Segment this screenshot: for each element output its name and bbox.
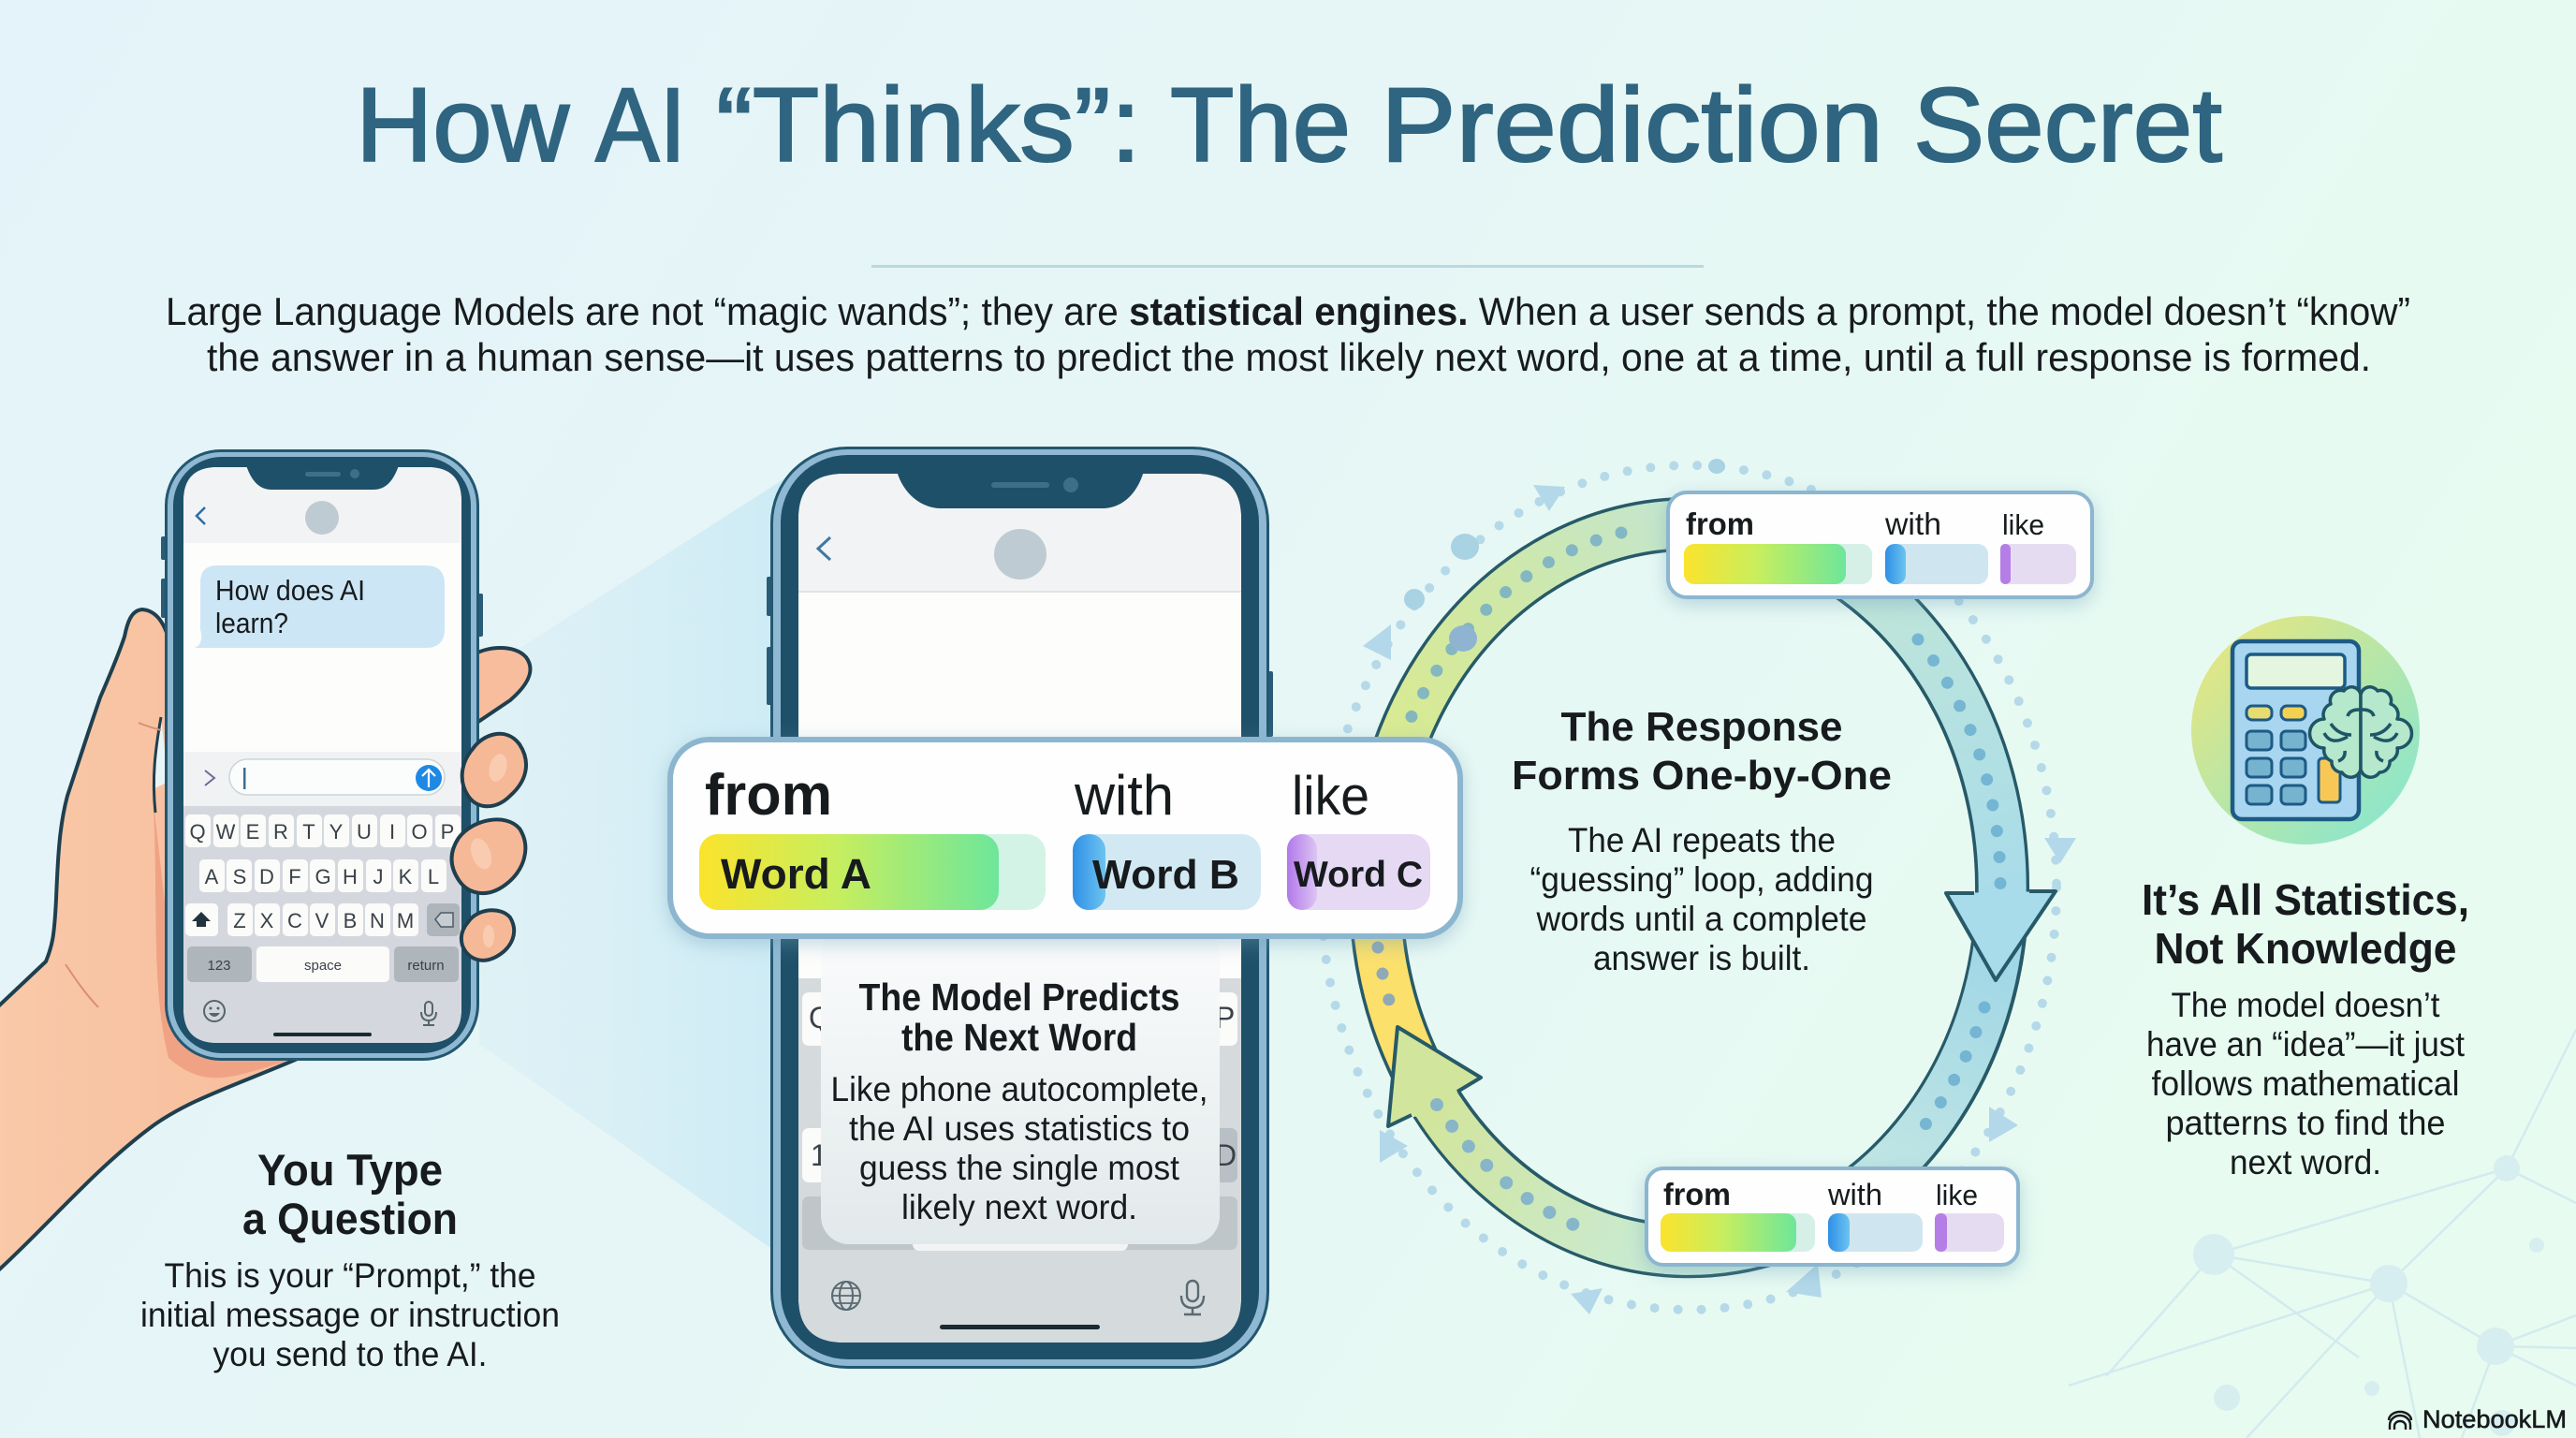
text: it's all statistics: next word. [2230, 1143, 2381, 1181]
keyboard: return [407, 958, 445, 974]
card: bottom small prediction: like [1936, 1179, 1978, 1211]
keyboard: S [233, 865, 246, 888]
keyboard: D [259, 865, 274, 888]
text: response forms one-by-one: “guessing” loop, adding [1530, 860, 1874, 899]
heading: you type a question: You Type [257, 1145, 443, 1195]
card: bottom small prediction: from [1663, 1177, 1731, 1211]
panel: you type a question [0, 449, 560, 1373]
heading: it's all statistics: Not Knowledge [2155, 924, 2456, 973]
bar: word b [1073, 834, 1261, 910]
text: it's all statistics: patterns to find the [2166, 1104, 2445, 1142]
text: it's all statistics [2146, 986, 2466, 1181]
bar: word c: Word C [1294, 855, 1423, 895]
keyboard: V [315, 909, 329, 932]
bar: word c [1287, 834, 1430, 910]
keyboard: J [373, 865, 384, 888]
card: top small prediction: from [1686, 506, 1754, 541]
keyboard: 1 [811, 1138, 827, 1172]
text: it's all statistics: The model doesn’t [2172, 986, 2440, 1024]
chat bubble: How does AI [215, 574, 365, 607]
intro text: Large Language Models are not “magic wands”; they are statistical engines. When a user sends a prompt, the model doesn’t “know” [166, 289, 2410, 333]
keyboard: D [1215, 1138, 1237, 1172]
card: top small prediction [1668, 492, 2092, 597]
intro text [166, 289, 2410, 379]
keyboard: U [357, 820, 372, 844]
keyboard: Q [809, 1001, 832, 1034]
title: Prediction [1381, 66, 1883, 183]
keyboard: K [399, 865, 413, 888]
notch [897, 471, 1144, 508]
card: main prediction [670, 740, 1460, 936]
back chevron [818, 537, 830, 560]
text: you type a question: initial message or instruction [140, 1296, 560, 1334]
brain [2310, 687, 2411, 777]
notch [246, 465, 399, 490]
cycle loop [1377, 524, 2056, 1251]
chat bubble [195, 565, 445, 648]
panel: the model predicts [821, 927, 1220, 1244]
text: response forms one-by-one: Forms One-by-One [1512, 753, 1892, 799]
keyboard: Y [329, 820, 344, 844]
panel: the model predicts: guess the single most [859, 1149, 1180, 1187]
keyboard: space [304, 958, 342, 974]
keyboard: I [389, 820, 395, 844]
keyboard: E [246, 820, 259, 844]
avatar [305, 501, 339, 535]
heading: it's all statistics [2142, 875, 2469, 973]
back chevron [197, 507, 205, 524]
avatar [994, 529, 1046, 580]
title: “Thinks”: [716, 66, 1141, 183]
keyboard: F [288, 865, 301, 888]
keyboard: C [287, 909, 302, 932]
icon: calculator and brain [2191, 616, 2420, 844]
text: response forms one-by-one: words until a complete [1536, 900, 1866, 938]
keyboard: 123 [207, 958, 231, 974]
keyboard: G [315, 865, 331, 888]
title: AI [595, 66, 686, 183]
panel: the model predicts: The Model Predicts [859, 976, 1179, 1019]
panel: the model predicts: the Next Word [901, 1016, 1137, 1059]
text: it's all statistics: follows mathematical [2151, 1064, 2460, 1103]
keyboard: A [205, 865, 219, 888]
heading: you type a question: a Question [242, 1194, 458, 1243]
fingers [451, 734, 526, 961]
keyboard: B [344, 909, 357, 932]
chat bubble: learn? [215, 607, 288, 639]
text: response forms one-by-one [1512, 704, 1892, 977]
input bar [183, 752, 461, 806]
logo: notebooklm: NotebookLM [2422, 1405, 2567, 1433]
keyboard [183, 806, 461, 1043]
card: bottom small prediction: with [1827, 1178, 1882, 1211]
text: you type a question: you send to the AI. [213, 1335, 487, 1373]
text: response forms one-by-one: The AI repeats the [1568, 821, 1836, 859]
outer dotted ring [1321, 459, 2076, 1314]
text: you type a question: This is your “Prompt,” the [165, 1256, 535, 1295]
panel: the model predicts: likely next word. [901, 1188, 1137, 1226]
card: top small prediction: with [1884, 506, 1941, 541]
text: response forms one-by-one: The Response [1561, 704, 1842, 750]
keyboard: O [411, 820, 428, 844]
card: main prediction: like [1292, 766, 1369, 827]
arc: top left [1377, 524, 1778, 852]
intro text: the answer in a human sense—it uses patterns to predict the most likely next word, one at a time, until a full response is formed. [207, 335, 2371, 379]
panel: the model predicts: the AI uses statistics to [849, 1109, 1190, 1148]
card: top small prediction: like [2002, 508, 2044, 541]
keyboard: M [397, 909, 414, 932]
zoom beam [479, 477, 786, 1259]
divider [871, 265, 1704, 268]
phone: large [767, 447, 1273, 1369]
keyboard: Q [189, 820, 206, 844]
panel: the model predicts: Like phone autocomplete, [831, 1070, 1208, 1108]
text: it's all statistics: have an “idea”—it just [2146, 1025, 2466, 1064]
bar: word a [699, 834, 1046, 910]
keyboard: P [441, 820, 454, 844]
card: main prediction: with [1074, 764, 1174, 827]
keyboard: X [260, 909, 274, 932]
keyboard: W [216, 820, 236, 844]
keyboard: R [273, 820, 288, 844]
bar: word a: Word A [721, 850, 871, 898]
title: Secret [1913, 66, 2222, 183]
keyboard: P [1215, 1001, 1235, 1034]
arrowhead: left [1388, 1027, 1597, 1234]
text: you type a question [140, 1256, 560, 1373]
text: response forms one-by-one: answer is built. [1593, 939, 1810, 977]
arrowhead: right [1946, 891, 2056, 980]
keyboard: Z [233, 909, 246, 932]
title: How [356, 66, 570, 183]
heading: it's all statistics: It’s All Statistics, [2142, 875, 2469, 924]
heading: you type a question [242, 1145, 458, 1243]
title: The [1170, 66, 1351, 183]
card: main prediction: from [705, 763, 832, 828]
phone: small [161, 449, 483, 1061]
title [356, 66, 2222, 183]
bar: word b: Word B [1092, 852, 1239, 898]
keyboard: L [428, 865, 439, 888]
keyboard: T [302, 820, 315, 844]
keyboard: H [343, 865, 358, 888]
card: bottom small prediction [1647, 1168, 2018, 1265]
hand [0, 609, 531, 1273]
arc: right lower [1825, 922, 2000, 1214]
arc: right upper [1778, 539, 2002, 899]
arc: bottom left [1432, 1097, 1778, 1251]
keyboard [798, 978, 1241, 1343]
keyboard: N [370, 909, 385, 932]
network pattern [2069, 1030, 2576, 1438]
arc: left yellow [1377, 922, 1418, 1072]
